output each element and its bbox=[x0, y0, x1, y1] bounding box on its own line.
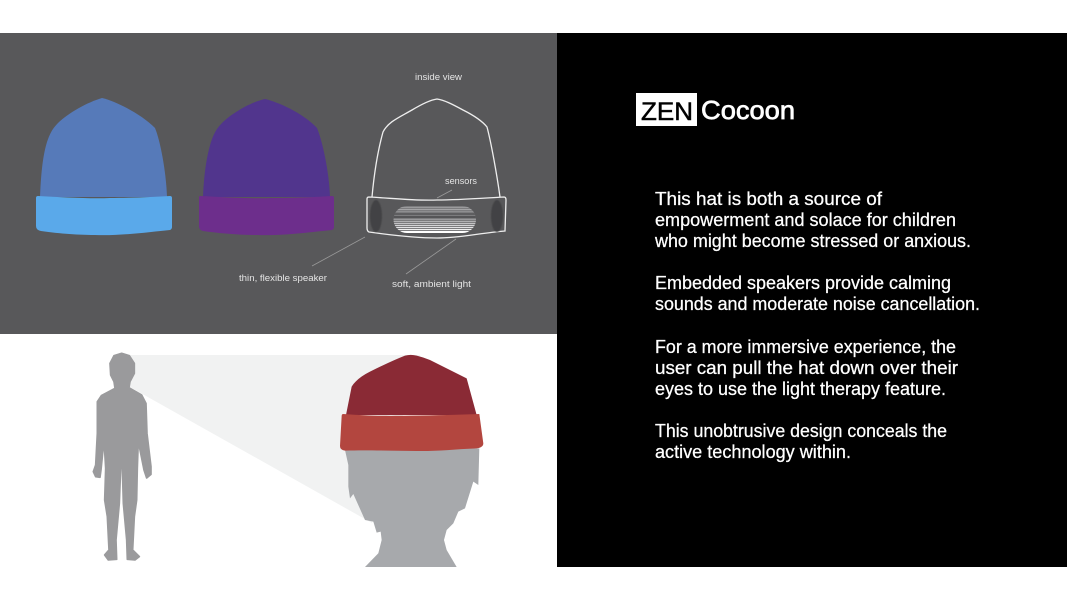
logo: ZEN Cocoon: ZEN bbox=[641, 98, 693, 126]
zoom cone bbox=[130, 355, 420, 523]
text block: design: This unobtrusive design conceals the bbox=[655, 421, 947, 441]
purple hat bbox=[199, 99, 334, 235]
label: thin, flexible speaker bbox=[239, 237, 365, 284]
text block: design: active technology within. bbox=[655, 442, 851, 462]
text block: speakers: Embedded speakers provide calming bbox=[655, 273, 951, 293]
logo: ZEN Cocoon: Cocoon bbox=[701, 95, 795, 125]
label: sensors bbox=[437, 176, 477, 198]
child silhouette bbox=[93, 353, 151, 560]
text block: design bbox=[655, 421, 947, 462]
text block: light therapy bbox=[655, 337, 958, 399]
speakers bbox=[370, 200, 503, 232]
inside view hat outline bbox=[367, 99, 506, 238]
label: sensors: sensors bbox=[445, 176, 477, 187]
panel: description bbox=[557, 33, 1067, 567]
text block: intro bbox=[654, 189, 971, 251]
ambient light bbox=[393, 206, 477, 233]
text block: speakers bbox=[655, 273, 980, 314]
label: thin, flexible speaker: thin, flexible speaker bbox=[239, 273, 327, 284]
label: soft, ambient light bbox=[392, 239, 471, 290]
label: inside view: inside view bbox=[415, 72, 462, 83]
label: soft, ambient light: soft, ambient light bbox=[392, 279, 471, 290]
text block: light therapy: user can pull the hat down over their bbox=[655, 358, 958, 378]
red hat bbox=[340, 355, 483, 451]
text block: intro: empowerment and solace for children bbox=[655, 210, 956, 230]
head silhouette bbox=[345, 448, 479, 567]
blue hat bbox=[36, 98, 172, 235]
logo: ZEN Cocoon bbox=[636, 93, 795, 126]
text block: intro: who might become stressed or anxious. bbox=[654, 231, 971, 251]
panel: child wearing the hat bbox=[0, 334, 557, 567]
text block: light therapy: eyes to use the light therapy feature. bbox=[655, 379, 946, 399]
text block: intro: This hat is both a source of bbox=[655, 189, 883, 209]
panel: hat colour variants and inside view bbox=[0, 33, 557, 334]
text block: speakers: sounds and moderate noise cancellation. bbox=[655, 294, 980, 314]
text block: light therapy: For a more immersive experience, the bbox=[655, 337, 956, 357]
